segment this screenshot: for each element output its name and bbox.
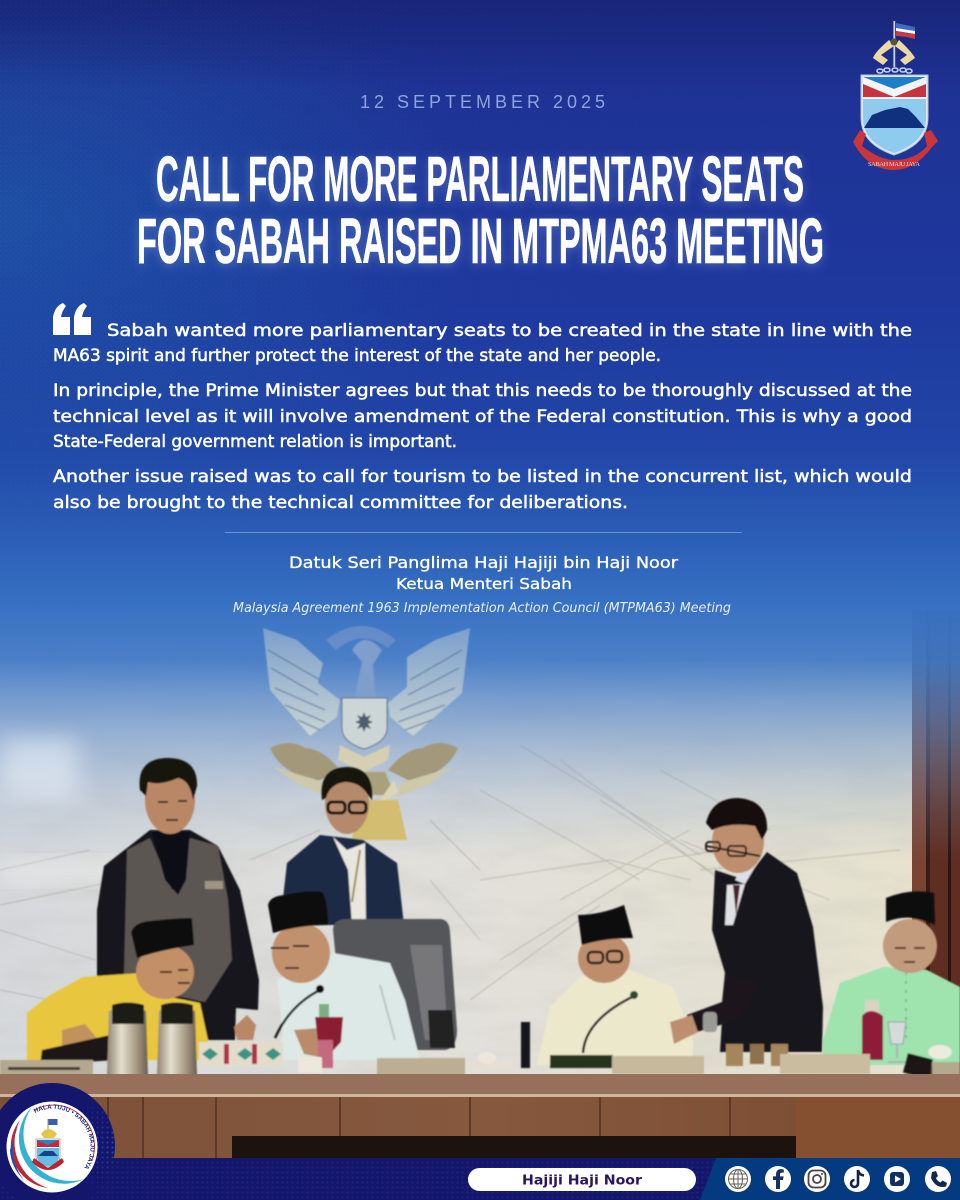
icon: website globe: [725, 1166, 751, 1192]
person: standing officer in black suit: [670, 798, 823, 1052]
quote text block: In principle, the Prime Minister agrees but that this needs to be thoroughly discussed at the: [53, 381, 912, 400]
attribution: Datuk Seri Panglima Haji Hajiji bin Haji Noor: [289, 553, 678, 572]
person: man in green baju: [823, 891, 960, 1065]
badge ring text: [35, 1109, 91, 1168]
person: man in white baju with songkok: [268, 891, 420, 1060]
icon: youtube play: [884, 1166, 910, 1192]
tissue box: [199, 1042, 283, 1066]
table items: bottle and glass right: [726, 1000, 906, 1066]
water bottle with red wrap: [315, 1004, 343, 1068]
office chair: [333, 919, 457, 1050]
name pill: Hajiji Haji Noor: [522, 1172, 642, 1188]
state emblem on wall: [263, 626, 470, 840]
shield: [861, 75, 928, 155]
icon: facebook: [765, 1166, 791, 1192]
hands holding pole: [873, 38, 915, 65]
quote text block: technical level as it will involve amendment of the Federal constitution. This is why a good: [53, 407, 912, 426]
name pill: [468, 1168, 696, 1191]
icon: instagram: [804, 1166, 830, 1192]
icon: tiktok: [844, 1166, 870, 1192]
icon: phone: [925, 1166, 951, 1192]
quote text block: [53, 321, 912, 512]
quote text block: Sabah wanted more parliamentary seats to be created in the state in line with the: [107, 321, 912, 340]
table items: thermos flasks: [107, 1002, 197, 1076]
attribution: [233, 553, 731, 616]
flag and pole: [893, 21, 915, 67]
title: [137, 143, 824, 277]
wreath: [877, 68, 912, 73]
date: 12 SEPTEMBER 2025: [360, 92, 605, 112]
footer bar: [0, 1158, 960, 1200]
photo: people at the table: [0, 758, 960, 1080]
attribution: Malaysia Agreement 1963 Implementation Action Council (MTPMA63) Meeting: [233, 600, 731, 616]
round logo badge bottom left: HALA TUJU • SABAH MAJU JAYA: [34, 1104, 95, 1169]
table front: [0, 1074, 960, 1160]
wood wall panel at right: [912, 610, 960, 1080]
round logo badge bottom left: [0, 1083, 115, 1198]
microphone centre and base: [521, 991, 638, 1068]
quote text block: State-Federal government relation is important.: [53, 432, 457, 451]
table name plates and cups: [0, 1045, 960, 1080]
quote text block: Another issue raised was to call for tourism to be listed in the concurrent list, which would: [53, 467, 912, 486]
red motto ribbon: SABAH MAJU JAYA: [868, 161, 920, 168]
blue gradient overlay: [0, 0, 960, 886]
icon: quotation mark: [53, 303, 91, 335]
crest top right: [853, 21, 938, 170]
microphone left: [275, 985, 324, 1038]
mini crest: [32, 1119, 64, 1170]
person: standing aide with glasses: [280, 767, 404, 925]
person: man in cream baju: [537, 905, 693, 1065]
attribution: Ketua Menteri Sabah: [396, 575, 572, 593]
person: standing officer in vest: [97, 758, 259, 1040]
quote text block: also be brought to the technical committee for deliberations.: [53, 493, 628, 512]
red motto ribbon: [853, 130, 938, 170]
quote text block: MA63 spirit and further protect the interest of the state and her people.: [53, 346, 661, 365]
person: man in yellow baju: [27, 918, 208, 1065]
